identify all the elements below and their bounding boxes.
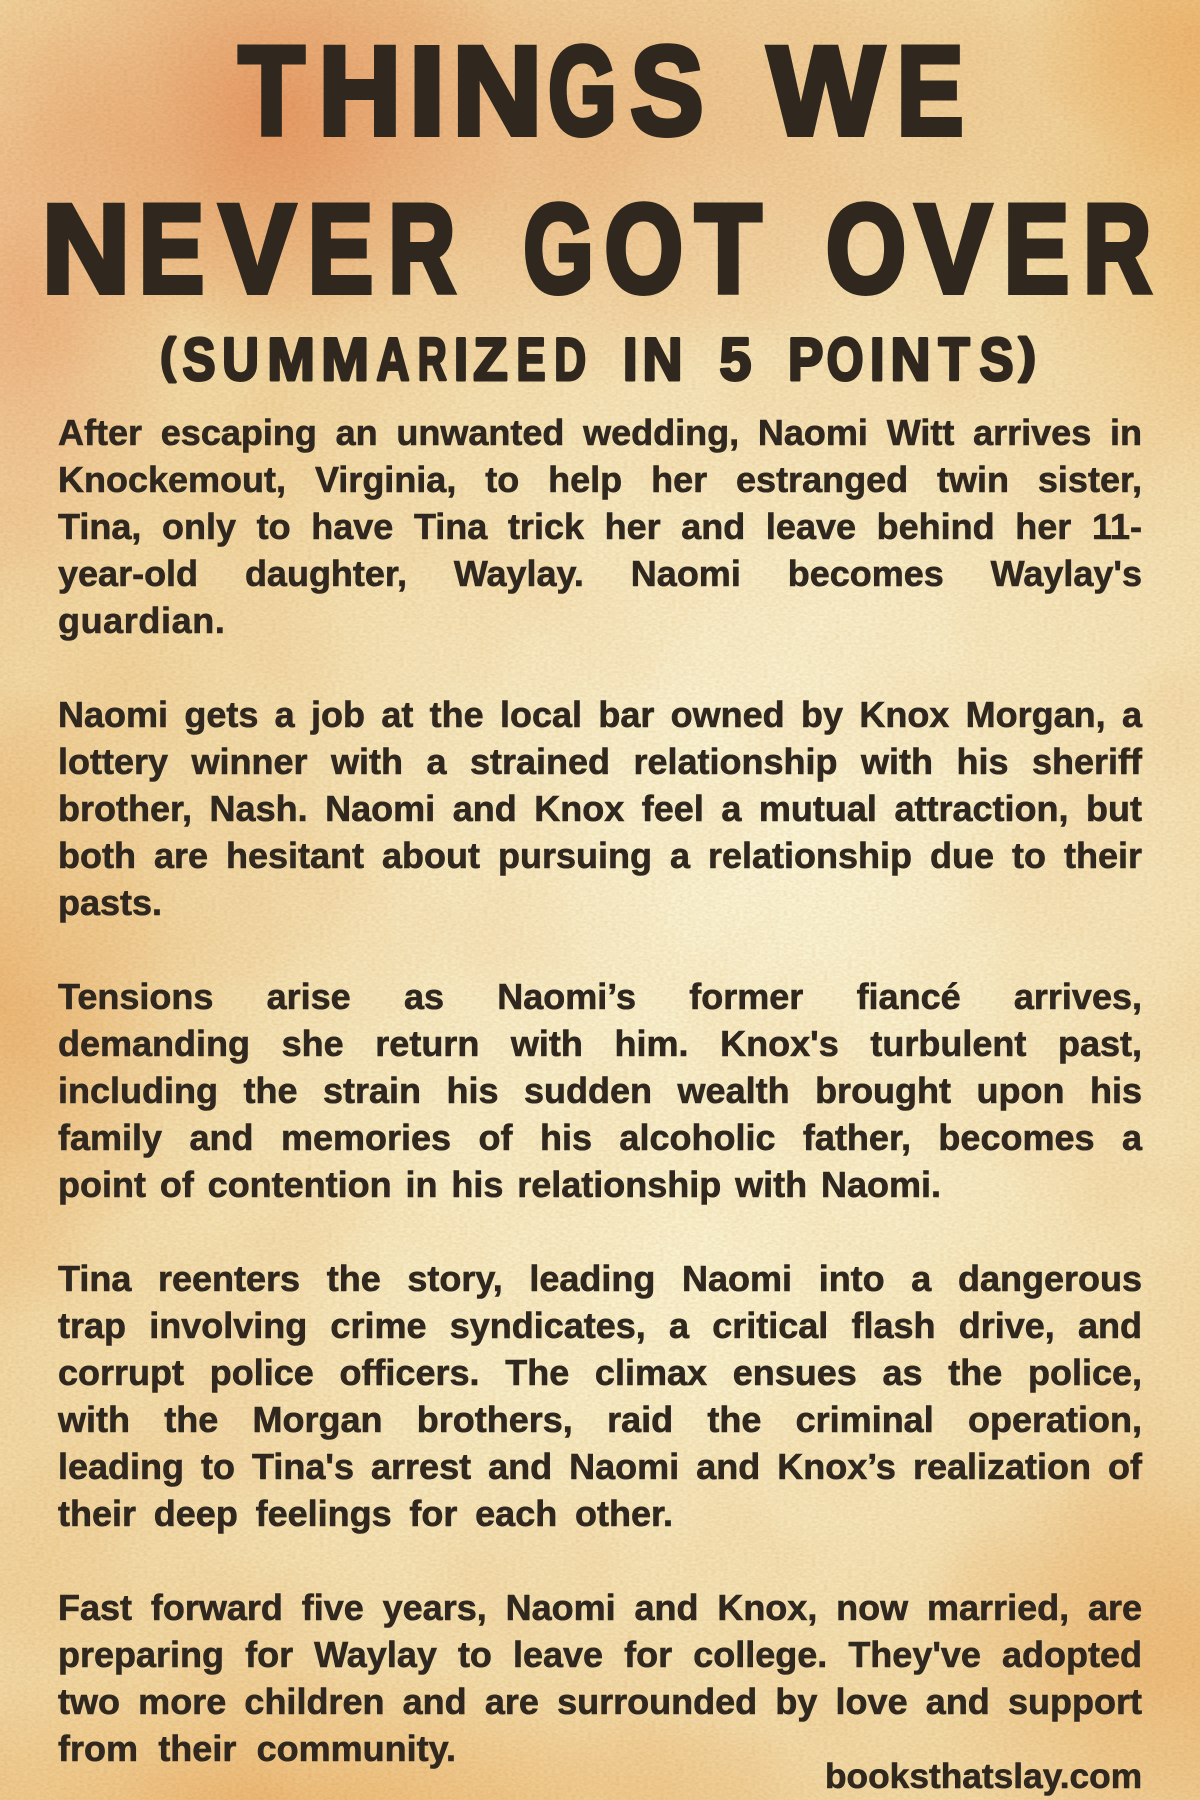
title and subtitle [42,22,1154,393]
subtitle: I [454,326,468,393]
subtitle: R [418,326,447,393]
subtitle: U [222,326,259,393]
title line 1: W [768,22,884,161]
subtitle: N [642,326,682,393]
poster: with the Morgan brothers, raid the criminal operation, [58,1399,1142,1440]
poster: point of contention in his relationship with Naomi. [58,1164,941,1205]
subtitle: ( [160,330,176,383]
title line 2: E [139,180,204,319]
subtitle: Z [473,326,508,393]
poster: Tensions arise as Naomi’s former fiancé arrives, [58,976,1142,1017]
paragraph 2 [58,694,1143,923]
poster: Fast forward five years, Naomi and Knox, now married, are [58,1587,1142,1628]
title line 2: E [308,180,373,319]
poster: year-old daughter, Waylay. Naomi becomes Waylay's [58,553,1142,594]
title line 2 [42,180,1151,319]
title line 2: N [42,180,130,319]
subtitle: ) [1019,330,1036,383]
paragraph 5 [58,1587,1142,1769]
title line 1 [239,22,963,161]
subtitle: 5 [720,326,751,393]
title line 2: E [1004,180,1069,319]
subtitle: I [870,326,884,393]
poster: both are hesitant about pursuing a relationship due to their [58,835,1142,876]
poster: brother, Nash. Naomi and Knox feel a mutual attraction, but [58,788,1142,829]
poster: Naomi gets a job at the local bar owned by Knox Morgan, a [58,694,1142,735]
subtitle: I [623,326,638,393]
poster: Tina, only to have Tina trick her and leave behind her 11- [58,506,1142,547]
poster: their deep feelings for each other. [58,1493,673,1534]
title line 2: G [524,180,594,319]
poster: lottery winner with a strained relationship with his sheriff [58,741,1142,782]
title line 1: G [548,22,616,161]
poster: leading to Tina's arrest and Naomi and Knox’s realization of [58,1446,1142,1487]
subtitle: T [938,326,970,393]
subtitle: S [980,326,1014,393]
title line 1: S [631,22,703,161]
poster: from their community. [58,1728,456,1769]
subtitle: D [554,326,586,393]
title line 2: T [695,180,761,319]
paragraph 1 [58,412,1142,641]
poster: two more children and are surrounded by love and support [58,1681,1142,1722]
title line 1: T [239,22,304,161]
title line 1: E [897,22,963,161]
poster: pasts. [58,882,162,923]
title line 1: I [409,22,445,161]
title line 2: V [916,180,991,319]
subtitle: N [890,326,930,393]
poster: Knockemout, Virginia, to help her estranged twin sister, [58,459,1142,500]
title line 2: R [388,180,455,319]
subtitle: M [267,326,315,393]
poster: guardian. [58,600,225,641]
subtitle: M [321,326,369,393]
poster: family and memories of his alcoholic father, becomes a [58,1117,1142,1158]
subtitle: S [182,326,216,393]
poster: demanding she return with him. Knox's turbulent past, [58,1023,1142,1064]
poster: After escaping an unwanted wedding, Naomi Witt arrives in [58,412,1142,453]
poster: preparing for Waylay to leave for college. They've adopted [58,1634,1142,1675]
poster: including the strain his sudden wealth brought upon his [58,1070,1142,1111]
poster: Tina reenters the story, leading Naomi into a dangerous [58,1258,1142,1299]
subtitle: O [827,326,863,393]
title line 2: O [605,180,683,319]
title line 1: N [453,22,542,161]
subtitle [160,326,1036,393]
title line 2: O [826,180,906,319]
title line 2: V [220,180,295,319]
poster: trap involving crime syndicates, a critical flash drive, and [58,1305,1142,1346]
title line 1: H [319,22,401,161]
subtitle: P [788,326,823,393]
website credit: booksthatslay.com [825,1757,1142,1796]
poster: corrupt police officers. The climax ensues as the police, [58,1352,1142,1393]
subtitle: E [516,326,546,393]
subtitle: A [376,326,410,393]
paragraph 3 [58,976,1143,1205]
paragraph 4 [58,1258,1142,1534]
title line 2: R [1083,180,1151,319]
